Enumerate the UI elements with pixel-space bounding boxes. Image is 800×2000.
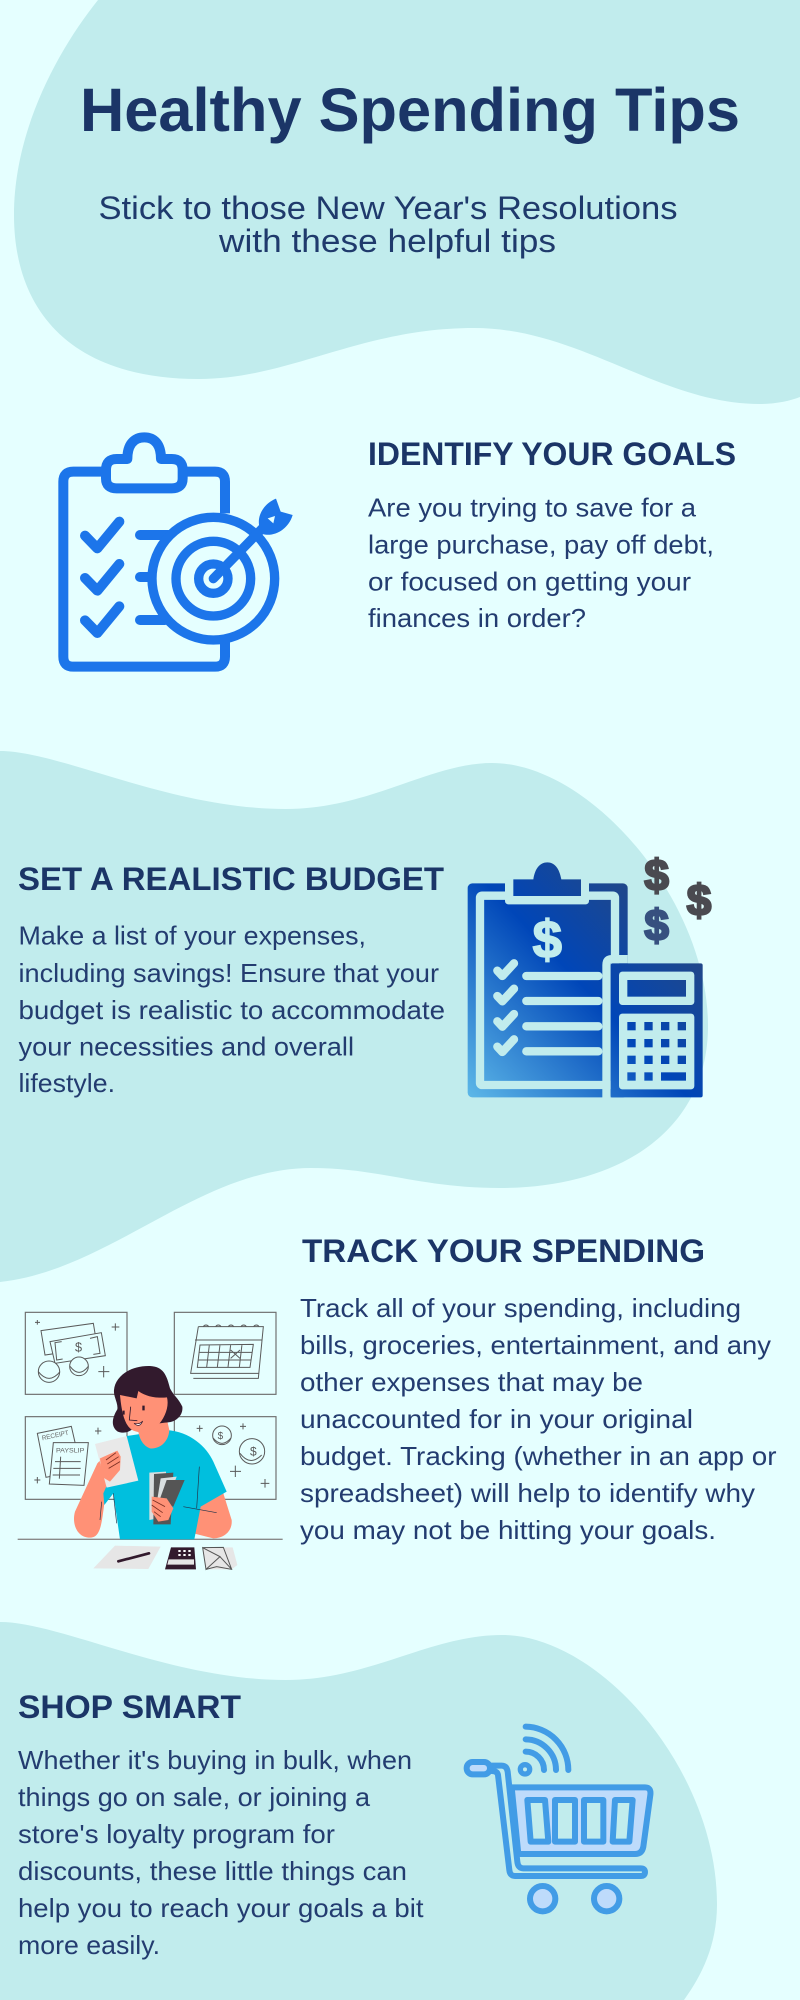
hair back	[113, 1366, 182, 1433]
illustration: person reviewing receipts: $	[75, 1341, 82, 1355]
body text	[18, 1745, 424, 1960]
dollar signs	[644, 852, 711, 951]
body text	[368, 492, 714, 633]
body text: Whether it's buying in bulk, when	[18, 1745, 412, 1775]
arms	[74, 1453, 122, 1538]
body text: your necessities and overall	[18, 1032, 354, 1062]
illustration: person reviewing receipts: PAYSLIP	[56, 1449, 84, 1455]
body text: store's loyalty program for	[18, 1819, 335, 1849]
body text: more easily.	[18, 1930, 160, 1960]
body text: discounts, these little things can	[18, 1856, 407, 1886]
body text	[300, 1293, 777, 1545]
handle	[467, 1762, 490, 1774]
blob: header	[14, 0, 800, 404]
body text	[18, 920, 445, 1098]
desk envelope	[203, 1547, 237, 1569]
hand holding paper	[100, 1451, 121, 1482]
body text: Are you trying to save for a	[368, 492, 697, 522]
icon: clipboard with target	[63, 437, 293, 667]
dollar signs: $	[687, 877, 711, 926]
cart frame	[490, 1766, 645, 1876]
icon: shopping cart with wifi	[467, 1727, 650, 1911]
illustration: person reviewing receipts	[18, 1312, 283, 1569]
desk calculator	[165, 1547, 196, 1569]
illustration: person reviewing receipts: RECEIPT	[41, 1430, 69, 1442]
section: identify your goals	[368, 436, 736, 633]
clipboard: $	[533, 910, 562, 969]
desk paper and pen	[93, 1546, 161, 1569]
wifi signal	[520, 1765, 530, 1774]
title: Healthy Spending Tips	[80, 76, 740, 144]
shirt	[103, 1430, 227, 1539]
heading: SET A REALISTIC BUDGET	[18, 861, 444, 897]
blob: budget section	[0, 751, 708, 1282]
body text: unaccounted for in your original	[300, 1404, 693, 1434]
subtitle	[98, 190, 678, 259]
body text: things go on sale, or joining a	[18, 1782, 371, 1812]
body text: other expenses that may be	[300, 1367, 643, 1397]
body text: including savings! Ensure that your	[18, 958, 439, 988]
background panels	[25, 1312, 276, 1499]
heading: TRACK YOUR SPENDING	[302, 1233, 705, 1269]
panel sketches	[34, 1320, 269, 1488]
section: set a realistic budget	[18, 861, 445, 1098]
heading: SHOP SMART	[18, 1689, 241, 1725]
body text: Track all of your spending, including	[300, 1293, 741, 1323]
dollar signs: $	[644, 902, 669, 951]
body text: finances in order?	[368, 603, 586, 633]
body text: or focused on getting your	[368, 566, 691, 596]
face	[120, 1391, 168, 1432]
clipboard	[468, 860, 628, 1097]
body text: Make a list of your expenses,	[18, 920, 366, 950]
hand holding cash	[152, 1497, 173, 1522]
body text: budget. Tracking (whether in an app or	[300, 1441, 777, 1471]
calculator	[602, 955, 703, 1103]
illustration: person reviewing receipts: $	[250, 1445, 257, 1459]
subtitle: with these helpful tips	[218, 223, 556, 259]
blob: shop smart section	[0, 1622, 717, 2000]
table line	[18, 1537, 283, 1541]
body text: spreadsheet) will help to identify why	[300, 1478, 755, 1508]
body text: bills, groceries, entertainment, and any	[300, 1330, 771, 1360]
heading: IDENTIFY YOUR GOALS	[368, 436, 736, 472]
wheels	[530, 1886, 555, 1911]
icon: budget clipboard and calculator	[468, 852, 711, 1103]
section: shop smart	[18, 1689, 424, 1960]
body text: budget is realistic to accommodate	[18, 995, 445, 1025]
illustration: person reviewing receipts: $	[218, 1431, 224, 1442]
cash in hand	[149, 1472, 167, 1520]
dollar signs: $	[644, 852, 669, 901]
body text: help you to reach your goals a bit	[18, 1893, 424, 1923]
body text: lifestyle.	[18, 1068, 115, 1098]
section: track your spending	[300, 1233, 777, 1545]
basket	[512, 1787, 650, 1854]
body text: large purchase, pay off debt,	[368, 530, 714, 560]
subtitle: Stick to those New Year's Resolutions	[98, 190, 678, 226]
body text: you may not be hitting your goals.	[300, 1515, 716, 1545]
paper in hand	[95, 1436, 138, 1488]
neck	[138, 1418, 169, 1448]
